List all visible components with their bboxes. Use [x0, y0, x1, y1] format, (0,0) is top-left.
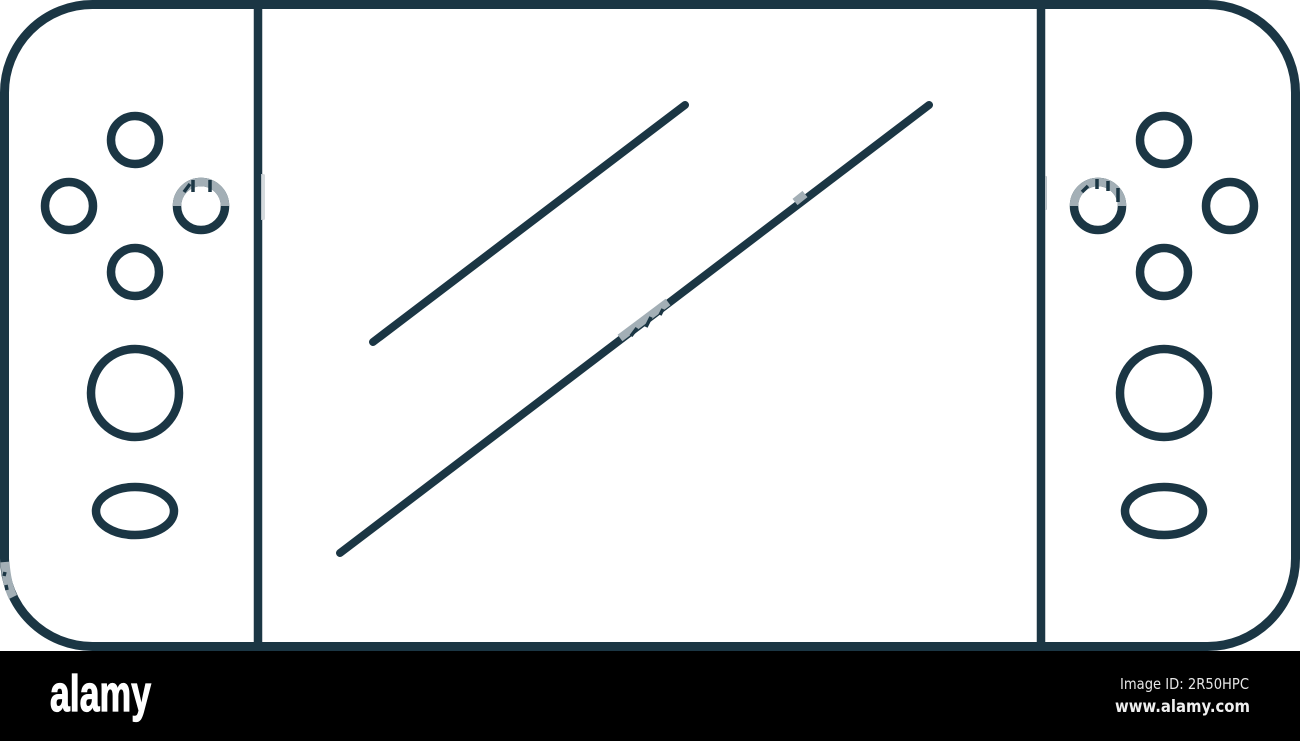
left d-pad right [177, 182, 225, 230]
left oval button [96, 487, 174, 535]
right button down [1140, 248, 1188, 296]
screen glare long [340, 105, 929, 553]
right button left [1074, 182, 1122, 230]
right button right [1206, 182, 1254, 230]
right controller [1074, 116, 1254, 535]
right joystick [1120, 349, 1208, 437]
left controller [45, 116, 225, 535]
screen glare short [373, 105, 685, 342]
left d-pad up [111, 116, 159, 164]
alamy logo: alamy [50, 665, 151, 722]
left d-pad down [111, 248, 159, 296]
website: www.alamy.com [1115, 697, 1250, 716]
left joystick [91, 349, 179, 437]
right oval button [1125, 487, 1203, 535]
footer bar [0, 651, 1300, 741]
left divider [254, 5, 262, 646]
image id: Image ID: 2R50HPC [1120, 675, 1249, 693]
right divider [1037, 5, 1045, 646]
footer background [0, 651, 1300, 741]
left d-pad left [45, 182, 93, 230]
right button up [1140, 116, 1188, 164]
watermark traces [4, 174, 1122, 597]
